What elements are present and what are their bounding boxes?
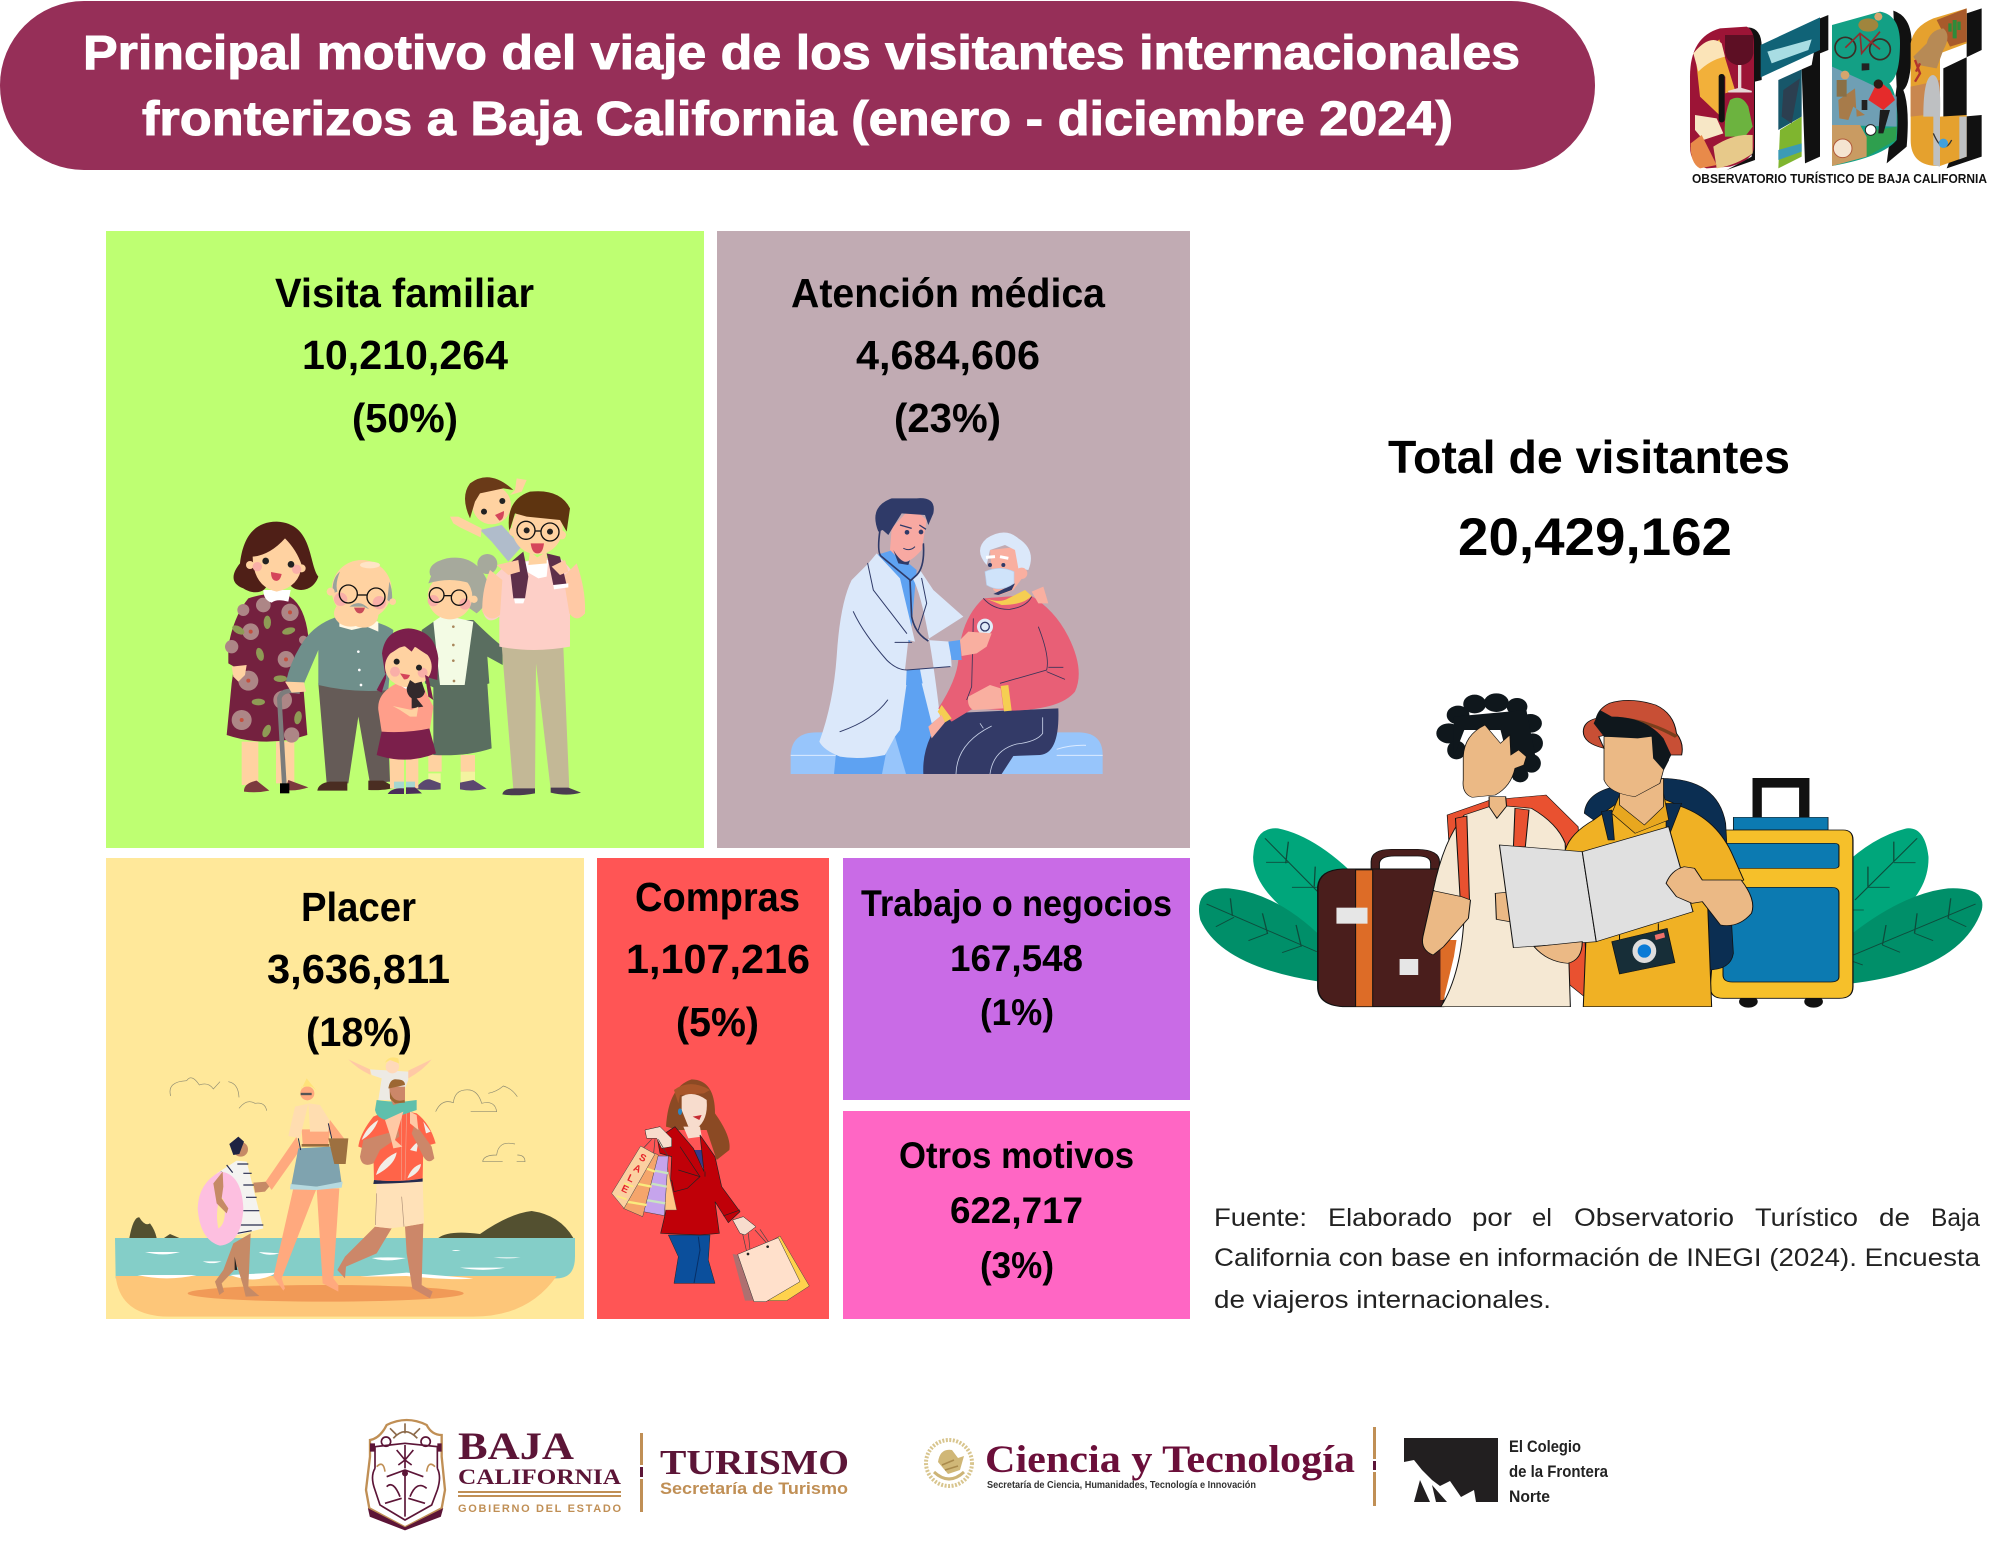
curly hair xyxy=(1436,693,1543,782)
percentage: (18%) xyxy=(306,1009,412,1055)
icon: state shield xyxy=(366,1420,445,1529)
granddaughter xyxy=(390,758,418,788)
map xyxy=(1499,845,1596,948)
person two xyxy=(1565,797,1744,1007)
logo: OTBC observatory: OBSERVATORIO TURÍSTICO DE BAJA CALIFORNIA xyxy=(1692,171,1987,186)
yellow suitcase xyxy=(1753,778,1809,817)
panel heading: Visita familiar xyxy=(275,270,534,316)
source note: de viajeros internacionales. xyxy=(1214,1286,1551,1314)
backpack orange xyxy=(1447,795,1588,1000)
woman xyxy=(273,1188,339,1292)
panel heading: Atención médica xyxy=(791,270,1106,316)
letter T xyxy=(1761,17,1820,77)
SALE bag lettering: S xyxy=(637,1152,648,1165)
father xyxy=(502,645,569,789)
panel: trabajo o negocios xyxy=(843,858,1190,1100)
percentage: (50%) xyxy=(352,395,458,441)
source note: Turístico xyxy=(1755,1204,1858,1232)
patient xyxy=(923,708,1058,774)
camera xyxy=(1620,923,1658,940)
percentage: (1%) xyxy=(980,992,1054,1033)
value: 3,636,811 xyxy=(267,946,450,992)
child with float xyxy=(215,1233,259,1297)
boy xyxy=(480,525,522,562)
logo: OTBC observatory xyxy=(1690,8,1987,186)
logo: Ciencia y Tecnología: Secretaría de Ciencia, Humanidades, Tecnología e Innovación xyxy=(987,1480,1256,1491)
person one xyxy=(1489,797,1507,819)
source note: Fuente: xyxy=(1214,1204,1307,1232)
panel heading: Compras xyxy=(635,874,800,920)
logo: El Colegio de la Frontera Norte: Norte xyxy=(1509,1487,1550,1506)
panel heading: Trabajo o negocios xyxy=(861,883,1172,924)
title banner: fronterizos a Baja California (enero - diciembre 2024) xyxy=(142,93,1453,146)
title banner xyxy=(0,1,1595,170)
logo: Ciencia y Tecnología xyxy=(926,1427,1376,1506)
value: 4,684,606 xyxy=(856,332,1040,378)
backpack navy xyxy=(1584,778,1733,970)
total visitors xyxy=(1388,431,1790,567)
illustration: doctor and patient xyxy=(791,498,1103,774)
value: 622,717 xyxy=(950,1190,1083,1231)
total visitors: 20,429,162 xyxy=(1458,508,1732,567)
source note: de xyxy=(1879,1204,1910,1232)
logo: El Colegio de la Frontera Norte: de la Frontera xyxy=(1509,1462,1608,1481)
value: 167,548 xyxy=(950,938,1083,979)
illustration: family xyxy=(225,477,585,795)
total visitors: Total de visitantes xyxy=(1388,431,1790,483)
icon: mountain mark xyxy=(1404,1438,1498,1502)
illustration: beach family xyxy=(115,1057,575,1317)
SALE bag lettering: L xyxy=(625,1173,636,1185)
letter B xyxy=(1832,12,1900,166)
letter C xyxy=(1911,8,1967,166)
title banner: Principal motivo del viaje de los visitantes internacionales xyxy=(83,27,1520,80)
value: 10,210,264 xyxy=(302,332,508,378)
SALE bag lettering: E xyxy=(619,1183,630,1196)
letter shadows xyxy=(1727,8,1982,170)
icon: national emblem xyxy=(926,1440,972,1486)
logo: El Colegio de la Frontera Norte xyxy=(1404,1437,1608,1506)
panel heading: Otros motivos xyxy=(899,1135,1134,1176)
source note xyxy=(1214,1204,1980,1314)
panel: atención médica xyxy=(717,231,1190,848)
panel: placer xyxy=(106,858,584,1319)
source note: California con base en información de INEGI (2024). Encuesta xyxy=(1214,1244,1980,1272)
percentage: (23%) xyxy=(894,395,1001,441)
source note: Elaborado xyxy=(1328,1204,1452,1232)
source note: el xyxy=(1532,1204,1552,1232)
logo: Baja California Turismo: GOBIERNO DEL ESTADO xyxy=(458,1503,621,1515)
panel: compras xyxy=(597,858,829,1319)
brown suitcase xyxy=(1371,849,1439,872)
panel heading: Placer xyxy=(301,884,416,930)
logo: Ciencia y Tecnología: Ciencia y Tecnología xyxy=(985,1438,1355,1481)
grandmother xyxy=(428,772,475,783)
logo: Baja California Turismo: CALIFORNIA xyxy=(458,1464,621,1489)
source note: por xyxy=(1472,1204,1512,1232)
SALE bag lettering xyxy=(619,1152,648,1196)
man with child xyxy=(337,1223,433,1298)
source note: Baja xyxy=(1931,1204,1980,1232)
logo: Baja California Turismo: TURISMO xyxy=(660,1443,849,1482)
mother xyxy=(242,742,294,785)
panel: visita familiar xyxy=(106,231,704,848)
logo: Baja California Turismo: BAJA xyxy=(458,1425,574,1468)
value: 1,107,216 xyxy=(626,936,810,982)
panel: otros motivos xyxy=(843,1111,1190,1319)
illustration: travelers xyxy=(1199,693,1982,1008)
illustration: shopper xyxy=(612,1079,809,1302)
grandfather xyxy=(318,683,390,783)
source note: Observatorio xyxy=(1574,1204,1734,1232)
percentage: (5%) xyxy=(676,999,759,1045)
leaves xyxy=(1253,828,1929,943)
logo: El Colegio de la Frontera Norte: El Colegio xyxy=(1509,1437,1581,1456)
logo: Baja California Turismo: Secretaría de Turismo xyxy=(660,1479,848,1498)
percentage: (3%) xyxy=(980,1245,1054,1286)
SALE bag lettering: A xyxy=(631,1163,643,1176)
logo: Baja California Turismo xyxy=(366,1420,849,1529)
letter O xyxy=(1690,27,1754,168)
